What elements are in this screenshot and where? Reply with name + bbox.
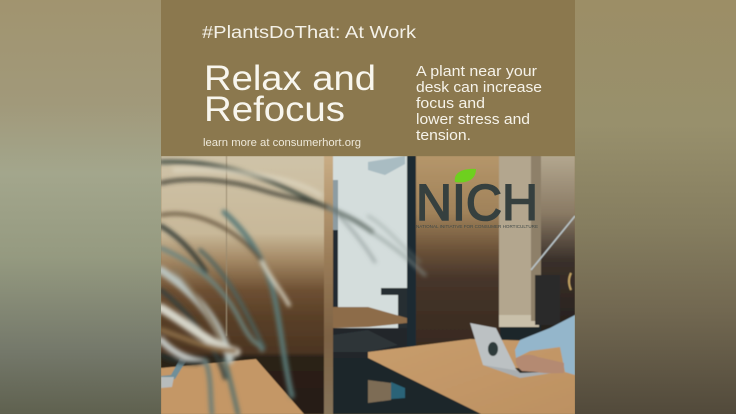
- logo subtitle: NATIONAL INITIATIVE FOR CONSUMER HORTICULTURE: [416, 224, 538, 229]
- wood partition right: [416, 156, 500, 346]
- description text: lower stress and: [416, 112, 530, 128]
- wood partition left: [161, 156, 325, 414]
- description text: A plant near your: [416, 64, 537, 80]
- logo: NICH: [416, 169, 538, 231]
- website link: learn more at consumerhort.org: [203, 137, 361, 149]
- small laptop: [161, 359, 186, 380]
- dark door right: [541, 156, 575, 346]
- description text: focus and: [416, 96, 485, 112]
- chair: [380, 288, 408, 329]
- left table: [161, 359, 304, 414]
- person: arm and shirt: [515, 315, 575, 375]
- laptop: [470, 323, 552, 378]
- title: Refocus: [204, 90, 345, 129]
- icon: green leaf: [455, 169, 476, 182]
- title: Relax and: [204, 59, 376, 98]
- mid table: [333, 307, 407, 328]
- background: right blurred side: [575, 0, 736, 414]
- description text: desk can increase: [416, 80, 542, 96]
- description text: [416, 64, 542, 144]
- background: left blurred side: [0, 0, 161, 414]
- title: [204, 59, 376, 129]
- photo: office with plant: [161, 156, 575, 414]
- white wall: [333, 156, 408, 346]
- hashtag heading: #PlantsDoThat: At Work: [202, 22, 416, 42]
- dark column: [406, 156, 409, 347]
- logo wordmark: NICH: [416, 174, 538, 231]
- panel: header: [161, 0, 575, 156]
- plant leaves: [161, 162, 425, 414]
- description text: tension.: [416, 128, 471, 144]
- stone wall: [499, 156, 531, 316]
- right table: [368, 339, 575, 414]
